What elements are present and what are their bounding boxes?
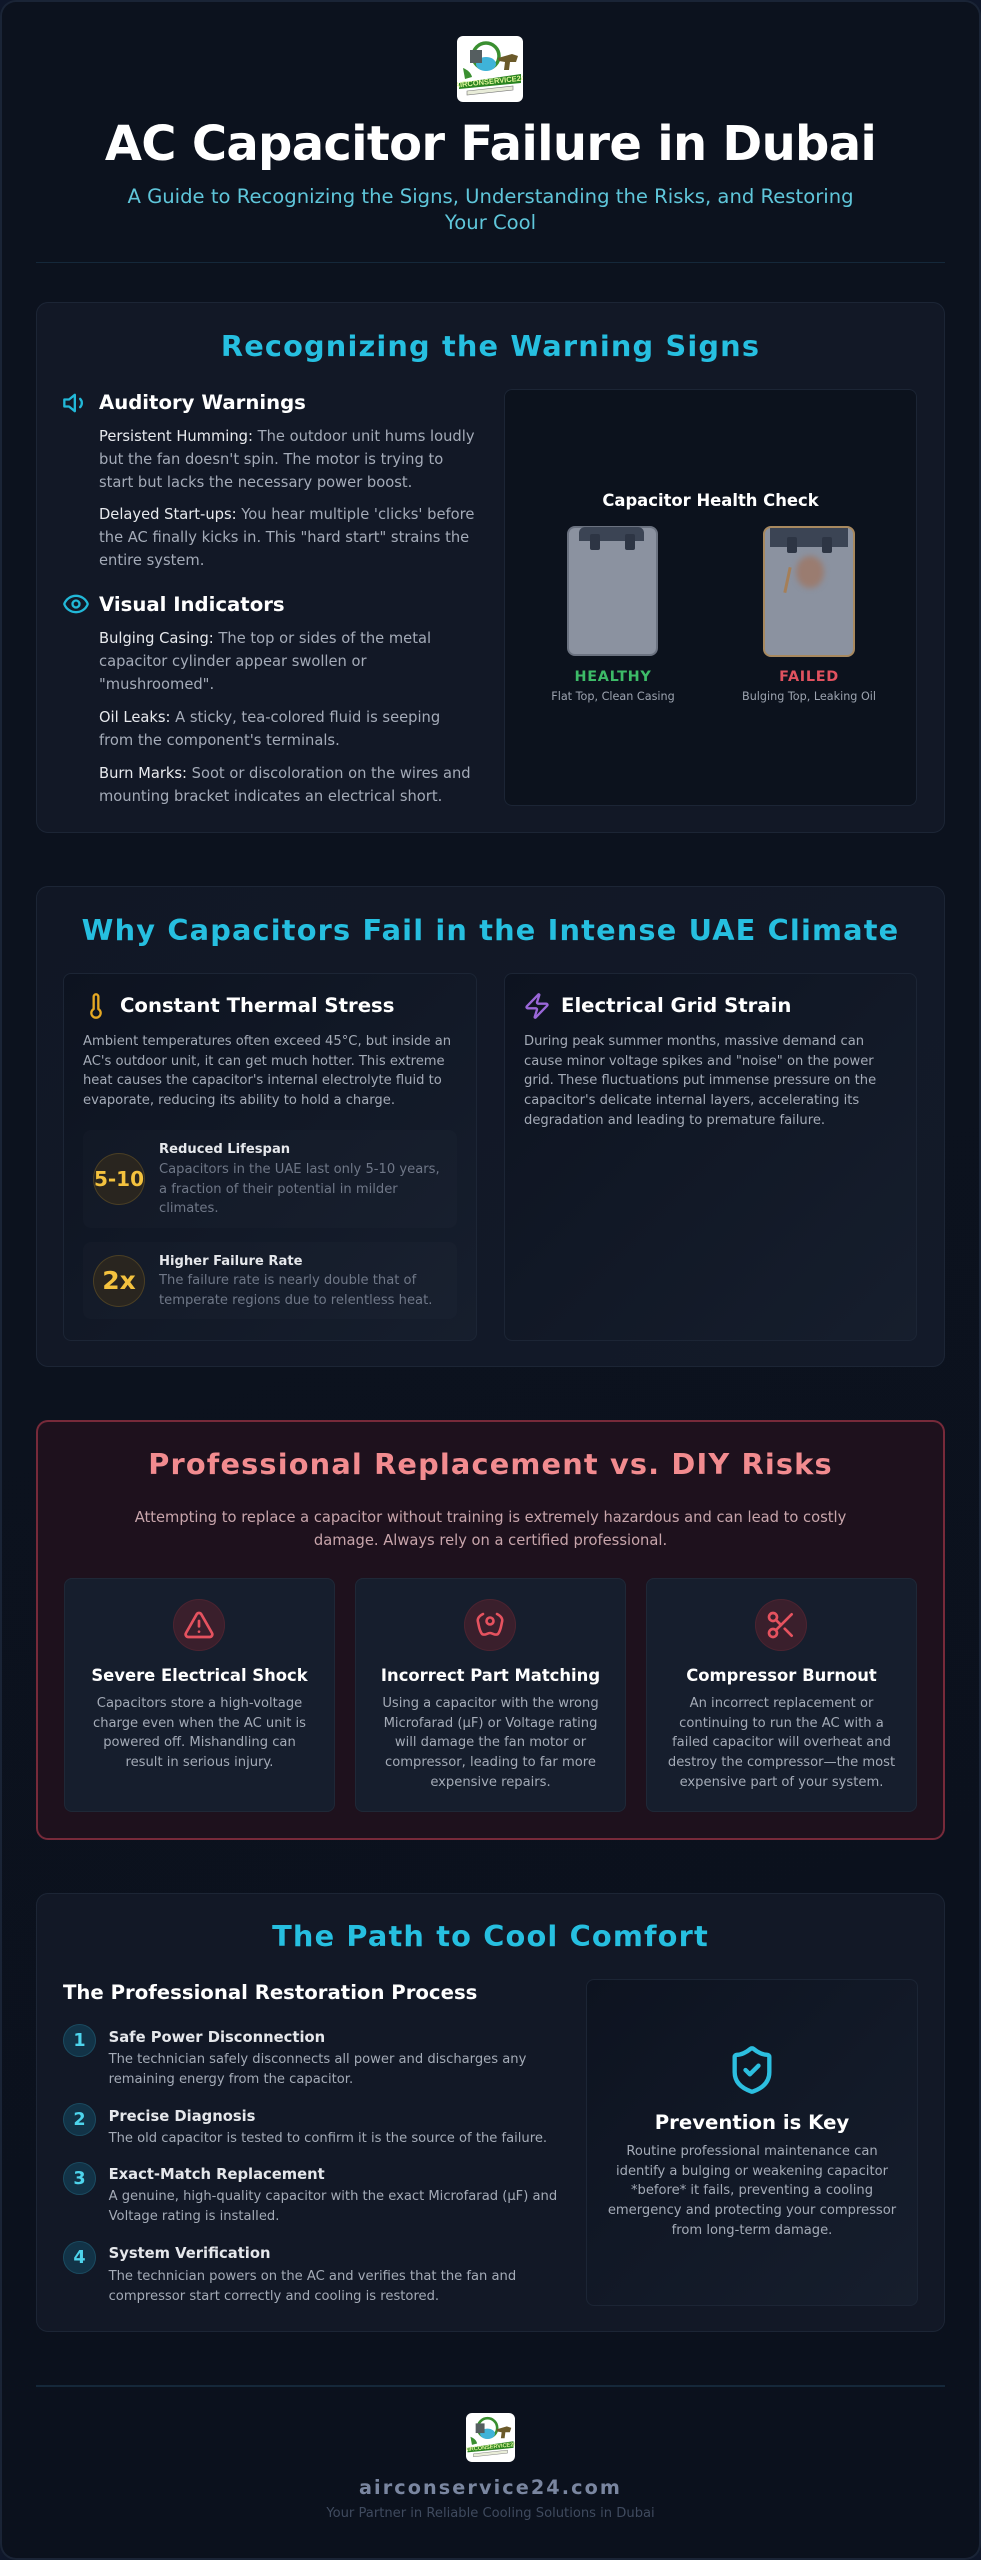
text: delayed start: the AC finally kicks in. This "hard start" strains the xyxy=(99,529,469,546)
capacitor illustration xyxy=(763,526,855,657)
subtitle: A Guide to Recognizing the Signs, Understanding the Risks, and Restoring xyxy=(127,184,854,208)
step number: 1 xyxy=(73,2031,86,2051)
step title: System Verification xyxy=(109,2245,270,2262)
card text: expensive part of your system. xyxy=(680,1775,883,1790)
step 2 xyxy=(63,2103,547,2146)
panel text: emergency and protecting your compressor xyxy=(608,2203,896,2218)
card text xyxy=(668,1696,895,1790)
label: HEALTHY xyxy=(574,669,651,685)
stat number xyxy=(93,1255,145,1307)
stat number: 5-10 xyxy=(94,1167,144,1191)
panel text: *before* it fails, preventing a cooling xyxy=(631,2183,873,2198)
step 3 xyxy=(63,2162,557,2224)
text: delayed start: entire system. xyxy=(99,552,204,569)
step number xyxy=(63,2024,96,2057)
text: oil leaks xyxy=(99,708,440,749)
text: bulging: capacitor cylinder appear swollen or xyxy=(99,653,367,670)
stat title: Higher Failure Rate xyxy=(159,1254,302,1269)
card text: result in serious injury. xyxy=(126,1755,273,1770)
stat: reduced lifespan xyxy=(83,1130,457,1228)
card text: expensive repairs. xyxy=(430,1775,551,1790)
text: bulging: "mushroomed". xyxy=(99,676,214,693)
card text xyxy=(524,1034,876,1128)
card text: capacitor's delicate internal layers, accelerating its xyxy=(524,1093,859,1108)
step title: Safe Power Disconnection xyxy=(109,2029,325,2046)
panel: path to cool comfort xyxy=(36,1893,945,2332)
stat: higher failure rate xyxy=(83,1242,457,1319)
card text xyxy=(83,1034,451,1108)
subheading: The Professional Restoration Process xyxy=(63,1981,477,2004)
text: oil leaks: from the component's terminals. xyxy=(99,732,340,749)
panel text: Routine professional maintenance can xyxy=(626,2144,878,2159)
text: humming: but the fan doesn't spin. The motor is trying to xyxy=(99,451,443,468)
label: FAILED xyxy=(779,669,839,685)
heading: auditory: Auditory Warnings xyxy=(99,390,306,414)
step number: 2 xyxy=(73,2110,86,2130)
step title: Exact-Match Replacement xyxy=(109,2166,325,2183)
card text: destroy the compressor—the most xyxy=(668,1755,895,1770)
caption: Bulging Top, Leaking Oil xyxy=(742,690,876,703)
panel text: identify a bulging or weakening capacitor xyxy=(616,2164,888,2179)
heading: Recognizing the Warning Signs xyxy=(221,328,760,362)
panel: professional replacement vs DIY xyxy=(36,1420,945,1840)
stat title: Reduced Lifespan xyxy=(159,1142,290,1157)
step text: compressor start correctly and cooling is restored. xyxy=(109,2289,439,2304)
stat text xyxy=(159,1162,440,1216)
icon: warning triangle xyxy=(173,1599,225,1651)
footer xyxy=(326,2413,655,2521)
card text: Capacitors store a high-voltage xyxy=(97,1696,302,1711)
step text: The technician safely disconnects all power and discharges any xyxy=(109,2052,526,2067)
card: electrical shock xyxy=(64,1578,335,1812)
subtitle: Your Cool xyxy=(445,210,536,234)
icon: bolt xyxy=(525,993,549,1019)
healthy capacitor xyxy=(551,526,675,703)
text: delayed start xyxy=(99,506,474,569)
text: burn marks: mounting bracket indicates an electrical short. xyxy=(99,788,442,805)
footer tagline: Your Partner in Reliable Cooling Solutions in Dubai xyxy=(326,2506,655,2521)
step text xyxy=(108,2189,557,2224)
step title: Precise Diagnosis xyxy=(109,2108,255,2125)
step text: Voltage rating is installed. xyxy=(109,2209,279,2224)
card text: heat causes the capacitor's internal electrolyte fluid to xyxy=(83,1073,442,1088)
panel heading: Prevention is Key xyxy=(655,2111,849,2134)
step 4 xyxy=(63,2241,516,2304)
caption: Flat Top, Clean Casing xyxy=(551,690,675,703)
card text: Ambient temperatures often exceed 45°C, but inside an xyxy=(83,1034,451,1049)
card: grid strain xyxy=(504,973,917,1341)
card text: charge even when the AC unit is xyxy=(93,1716,306,1731)
stat text xyxy=(159,1273,432,1308)
panel: capacitor health check xyxy=(504,389,917,806)
panel: why capacitors fail xyxy=(36,886,945,1367)
icon: thermometer xyxy=(90,993,102,1019)
text: humming xyxy=(99,428,475,491)
header xyxy=(105,36,876,234)
card text: will damage the fan motor or xyxy=(395,1735,586,1750)
text: humming: start but lacks the necessary power boost. xyxy=(99,474,412,491)
heading: visual: Visual Indicators xyxy=(99,593,285,616)
intro text: Attempting to replace a capacitor without training is extremely hazardous and can lead to costly xyxy=(135,1509,846,1526)
card title: Compressor Burnout xyxy=(686,1666,877,1685)
card: incorrect part xyxy=(355,1578,626,1812)
title: AC Capacitor Failure in Dubai xyxy=(105,116,876,172)
step number xyxy=(63,2103,96,2136)
panel: recognizing the warning signs xyxy=(36,302,945,833)
card: thermal stress xyxy=(63,973,477,1341)
card text: compressor, leading to far more xyxy=(385,1755,596,1770)
card title: Incorrect Part Matching xyxy=(381,1666,600,1685)
icon: eye xyxy=(63,594,89,614)
logo xyxy=(457,36,523,102)
step number xyxy=(63,2162,96,2195)
step text xyxy=(108,2269,516,2304)
heading: Professional Replacement vs. DIY Risks xyxy=(148,1446,833,1480)
intro text xyxy=(134,1509,846,1549)
step text xyxy=(108,2052,526,2087)
card text xyxy=(382,1696,599,1790)
stat text: temperate regions due to relentless heat. xyxy=(159,1293,432,1308)
card text: degradation and leading to premature failure. xyxy=(524,1113,825,1128)
card text: evaporate, reducing its ability to hold a charge. xyxy=(83,1093,395,1108)
card heading: Electrical Grid Strain xyxy=(561,994,791,1017)
step 1 xyxy=(63,2024,526,2087)
stat text: a fraction of their potential in milder xyxy=(159,1182,398,1197)
text: burn marks: Burn Marks: Soot or discoloration on the wires and xyxy=(99,765,471,782)
text: bulging: Bulging Casing: The top or sides of the metal xyxy=(99,630,431,647)
card text: cause minor voltage spikes and "noise" on the power xyxy=(524,1054,874,1069)
card text: AC's outdoor unit, it can get much hotter. This extreme xyxy=(83,1054,445,1069)
card text: An incorrect replacement or xyxy=(690,1696,873,1711)
card text: Using a capacitor with the wrong xyxy=(382,1696,599,1711)
heading: The Path to Cool Comfort xyxy=(272,1918,709,1952)
card text: grid. These fluctuations put immense pressure on the xyxy=(524,1073,876,1088)
step number: 4 xyxy=(73,2248,86,2268)
card text xyxy=(93,1696,306,1770)
intro text: damage. Always rely on a certified professional. xyxy=(314,1532,667,1549)
failed capacitor xyxy=(742,526,876,703)
step text: A genuine, high-quality capacitor with the exact Microfarad (µF) and xyxy=(109,2189,557,2204)
card heading: Constant Thermal Stress xyxy=(120,994,394,1017)
text: humming: Persistent Humming: The outdoor unit hums loudly xyxy=(99,428,475,444)
step text: The old capacitor is tested to confirm it is the source of the failure. xyxy=(109,2131,547,2146)
text: oil leaks: Oil Leaks: A sticky, tea-colored fluid is seeping xyxy=(99,708,440,726)
icon: scissors xyxy=(755,1599,807,1651)
panel text: from long-term damage. xyxy=(672,2223,832,2238)
footer site name: airconservice24.com xyxy=(359,2476,622,2499)
text: burn marks xyxy=(99,765,471,805)
card text: continuing to run the AC with a xyxy=(679,1716,884,1731)
step number: 3 xyxy=(73,2169,86,2189)
card text: Microfarad (µF) or Voltage rating xyxy=(384,1716,597,1731)
step text: remaining energy from the capacitor. xyxy=(109,2072,353,2087)
heading: Capacitor Health Check xyxy=(602,491,819,510)
panel: prevention is key xyxy=(586,1979,918,2306)
icon: part xyxy=(464,1599,516,1651)
heading: Why Capacitors Fail in the Intense UAE Climate xyxy=(82,912,899,946)
capacitor illustration xyxy=(567,526,658,656)
stat text: climates. xyxy=(159,1201,218,1216)
stat text: The failure rate is nearly double that of xyxy=(159,1273,416,1288)
step number xyxy=(63,2241,96,2274)
block: visual indicators xyxy=(63,593,471,805)
card text: During peak summer months, massive demand can xyxy=(524,1034,864,1049)
stat number xyxy=(93,1153,145,1205)
step text: The technician powers on the AC and verifies that the fan and xyxy=(109,2269,516,2284)
block: auditory warnings xyxy=(63,390,475,569)
card: compressor burnout xyxy=(646,1578,917,1812)
card text: failed capacitor will overheat and xyxy=(672,1735,891,1750)
subtitle xyxy=(127,184,854,234)
stat number: 2x xyxy=(102,1266,136,1295)
panel text xyxy=(608,2144,896,2238)
text: delayed start: Delayed Start-ups: You hear multiple 'clicks' before xyxy=(99,506,474,523)
icon: shield check xyxy=(732,2046,772,2094)
card text: powered off. Mishandling can xyxy=(103,1735,296,1750)
stat text: Capacitors in the UAE last only 5-10 years, xyxy=(159,1162,440,1177)
text: bulging xyxy=(99,630,431,693)
footer logo xyxy=(466,2413,515,2462)
card title: Severe Electrical Shock xyxy=(91,1666,308,1685)
icon: speaker xyxy=(63,394,83,412)
